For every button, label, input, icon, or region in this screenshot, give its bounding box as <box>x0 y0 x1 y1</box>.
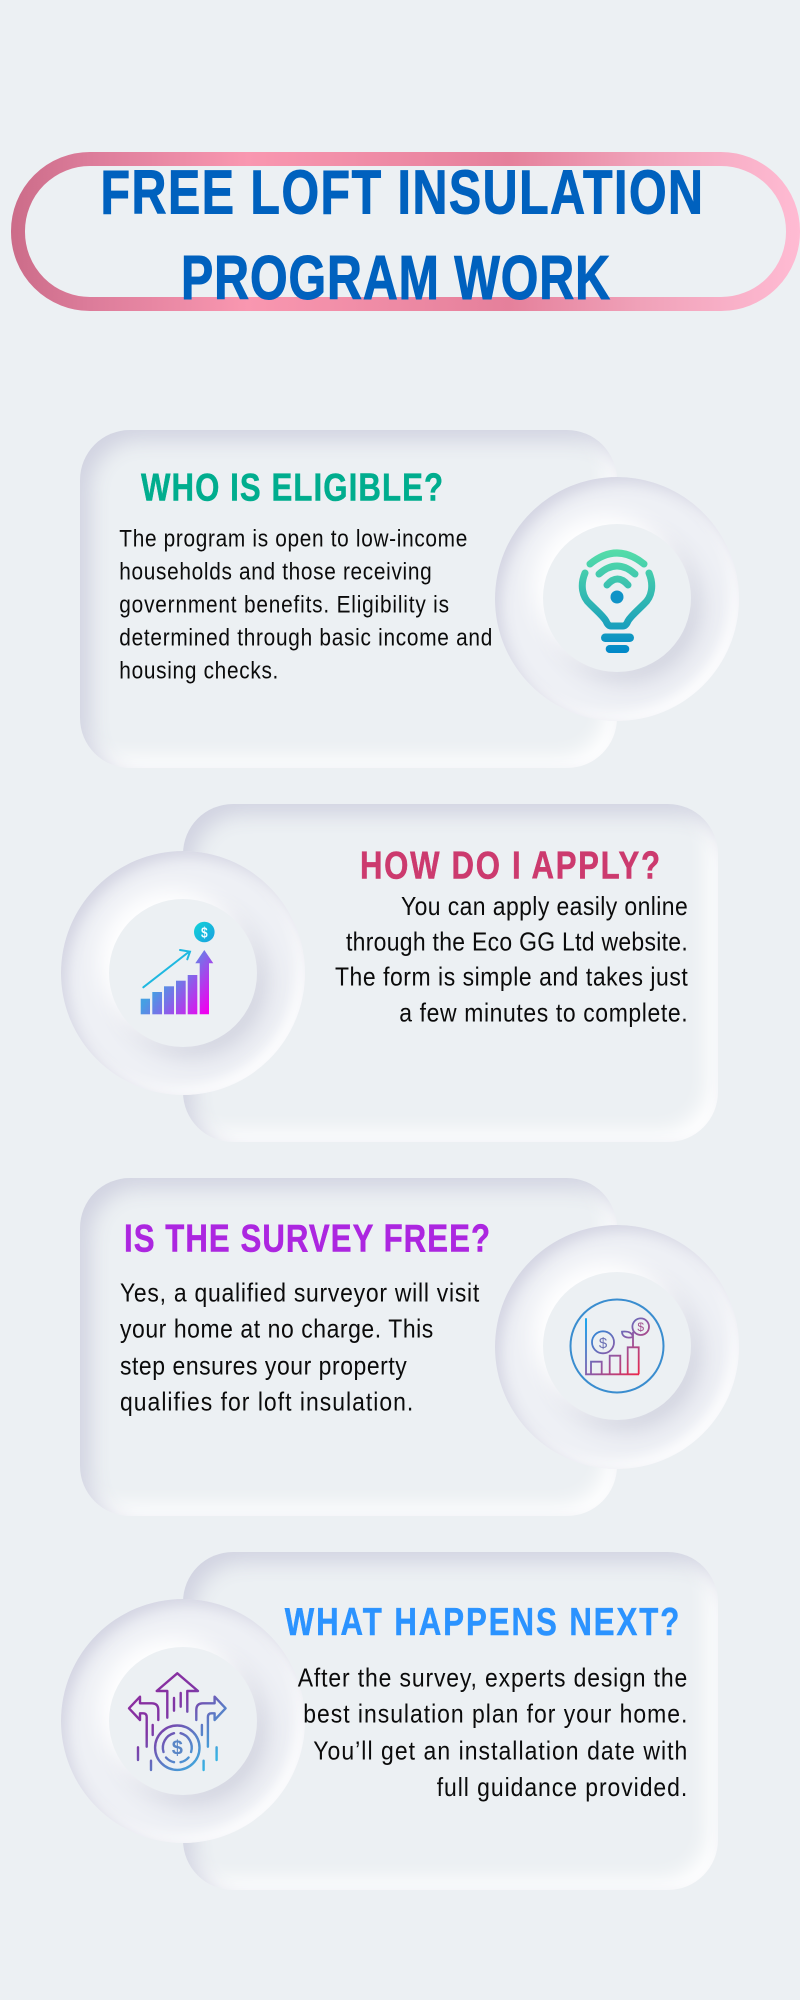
card background <box>80 1178 617 1516</box>
pill outline <box>18 159 793 304</box>
body text: government benefits. Eligibility is <box>119 590 449 618</box>
icon: savings growth chart in circle: $ <box>599 1335 608 1352</box>
body text: step ensures your property <box>120 1353 408 1381</box>
icon: dollar coin with three arrows <box>129 1673 226 1770</box>
card background <box>80 430 617 768</box>
icon ring <box>61 851 305 1095</box>
body text <box>335 893 688 1028</box>
panel: who is eligible <box>80 430 738 768</box>
title text: FREE LOFT INSULATION <box>100 158 703 227</box>
title text: PROGRAM WORK <box>181 243 610 312</box>
body text: You’ll get an installation date with <box>313 1737 687 1766</box>
body text: determined through basic income and <box>119 623 492 651</box>
icon: wifi light bulb <box>582 553 652 653</box>
heading: WHAT HAPPENS NEXT? <box>285 1601 679 1644</box>
card background <box>183 804 718 1142</box>
title text <box>100 158 703 312</box>
body text: Yes, a qualified surveyor will visit <box>120 1280 480 1308</box>
body text: qualifies for loft insulation. <box>120 1389 413 1417</box>
title pill <box>11 152 800 312</box>
icon inner disc <box>543 524 691 672</box>
card background <box>183 1552 718 1890</box>
body text: your home at no charge. This <box>120 1316 433 1344</box>
icon inner disc <box>543 1272 691 1420</box>
panel content <box>120 1217 664 1417</box>
body text: a few minutes to complete. <box>399 1000 688 1028</box>
panel content <box>140 844 688 1028</box>
icon inner disc <box>108 899 256 1047</box>
panel content <box>128 1601 687 1802</box>
panel: how do i apply <box>61 804 718 1142</box>
body text <box>298 1665 687 1802</box>
icon ring <box>61 1599 305 1843</box>
icon: savings growth chart in circle: $ <box>637 1320 644 1334</box>
body text: The program is open to low-income <box>119 524 467 552</box>
body text: The form is simple and takes just <box>335 964 688 992</box>
body text <box>119 524 492 684</box>
panel: is the survey free <box>80 1178 738 1516</box>
body text <box>120 1280 480 1417</box>
heading: HOW DO I APPLY? <box>360 844 660 887</box>
body text: through the Eco GG Ltd website. <box>346 929 688 957</box>
body text: You can apply easily online <box>401 893 688 921</box>
heading: IS THE SURVEY FREE? <box>124 1217 490 1261</box>
icon ring <box>495 1225 739 1469</box>
panel content <box>119 466 656 684</box>
body text: full guidance provided. <box>437 1774 687 1802</box>
icon: growth chart with dollar coin <box>141 922 215 1014</box>
body text: After the survey, experts design the <box>298 1665 687 1693</box>
panel: what happens next <box>61 1552 718 1890</box>
heading: WHO IS ELIGIBLE? <box>141 466 443 509</box>
body text: best insulation plan for your home. <box>303 1701 687 1729</box>
icon: savings growth chart in circle <box>570 1300 664 1392</box>
body text: households and those receiving <box>119 557 432 585</box>
icon inner disc <box>108 1647 256 1795</box>
icon: growth chart with dollar coin: $ <box>201 924 208 941</box>
icon: dollar coin with three arrows: $ <box>172 1738 183 1760</box>
icon ring <box>495 477 739 721</box>
body text: housing checks. <box>119 656 278 684</box>
